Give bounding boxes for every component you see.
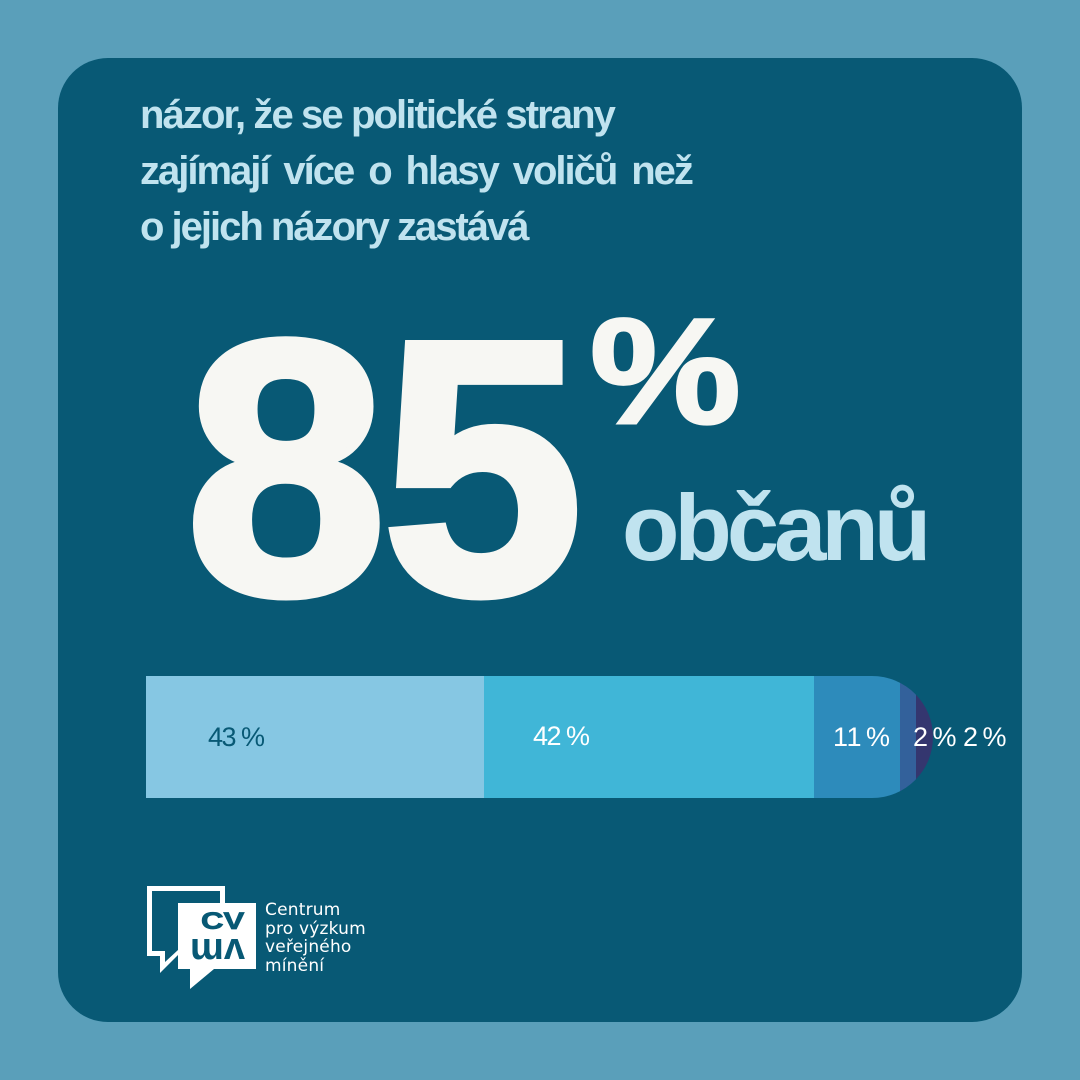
logo monogram: inverted letters: vm [190, 930, 245, 972]
heading: statement: o jejich názory zastává [140, 205, 528, 249]
logo: speech bubbles [147, 886, 256, 989]
heading: statement [140, 93, 692, 249]
percent sign: % [590, 287, 741, 455]
logo monogram: CV: CV [201, 908, 244, 935]
label: občanů: občanů [622, 475, 926, 580]
heading: statement: názor, že se politické strany [140, 93, 614, 137]
logo text: mínění [265, 956, 324, 976]
stacked bar chart [146, 676, 933, 798]
bar label 43: 43 % [208, 722, 264, 752]
bar label 2: 2 % [913, 722, 955, 752]
bar label 42: 42 % [533, 721, 589, 751]
bar label 2: 2 % [963, 722, 1005, 752]
panel: main card [58, 58, 1022, 1022]
logo text: Centrum [265, 900, 340, 920]
logo text: veřejného [265, 937, 352, 957]
bar label 11: 11 % [833, 722, 889, 752]
logo text: pro výzkum [265, 919, 366, 939]
logo text [265, 900, 366, 976]
heading: statement: zajímají více o hlasy voličů než [140, 149, 692, 193]
big number: 85: 85 [186, 265, 578, 670]
